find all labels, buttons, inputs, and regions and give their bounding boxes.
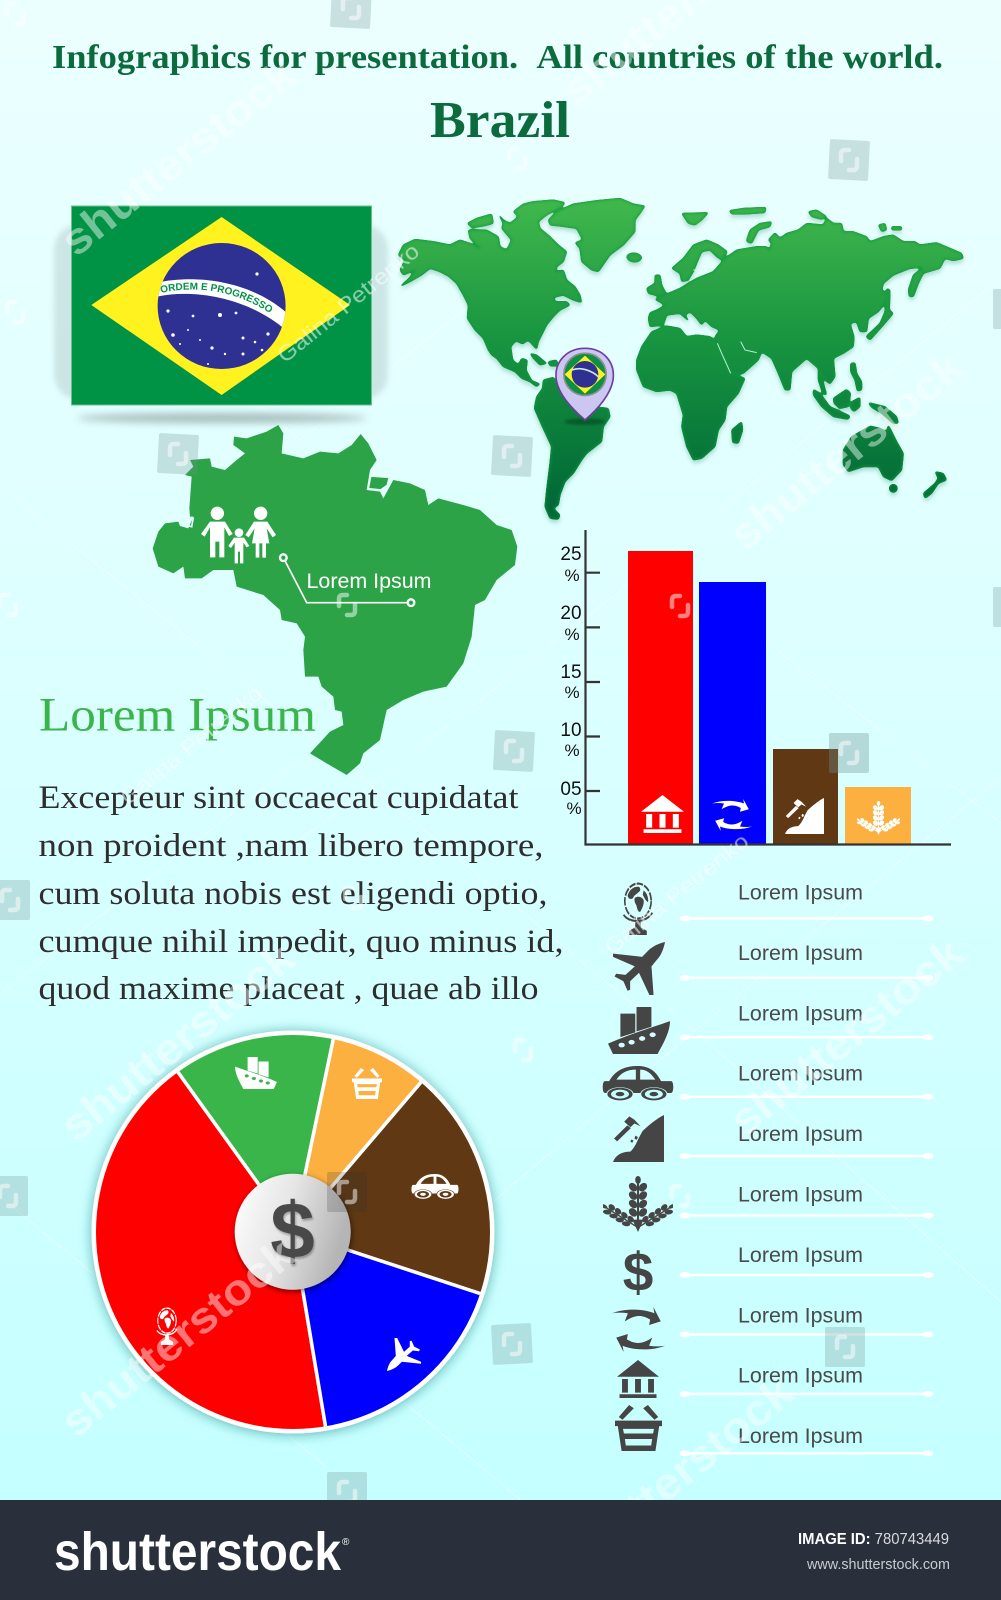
chart axes and ticks [586,530,951,844]
shutterstock watermark text: shutterstock [51,933,304,1151]
icon: dollar: $ [623,1241,653,1303]
pie chart [83,1023,503,1444]
axis labels: 05 [560,779,582,800]
legend labels: Lorem Ipsum [738,1364,863,1388]
title: Infographics for presentation. All countries of the world. [52,39,943,76]
axis labels: % [564,625,580,644]
icon: bank [617,1360,659,1398]
flag motto: ORDEM E PROGRESSO [160,282,272,312]
footer logo: shutterstock [54,1522,342,1582]
body paragraph: cumque nihil impedit, quo minus id, [38,924,564,960]
legend divider lines [680,916,934,1456]
icon: ship [608,1007,670,1054]
eurasia, africa and oceania [637,207,963,498]
site url: www.shutterstock.com [806,1557,950,1573]
legend labels: Lorem Ipsum [738,1122,863,1146]
legend labels: Lorem Ipsum [738,1424,863,1448]
bar: orange [845,787,911,844]
author watermark text: Galina Petrenko [599,828,753,960]
callout label: Lorem Ipsum [306,569,432,593]
legend labels: Lorem Ipsum [738,880,863,904]
axis labels: 25 [560,544,582,565]
map pin with flag [556,348,613,425]
author watermark text: Galina Petrenko [272,238,424,368]
axis labels: 20 [560,603,582,624]
text heading: Lorem Ipsum [39,688,316,742]
axis labels: % [564,741,580,760]
body paragraph: non proident ,nam libero tempore, [38,828,544,864]
pie centre hub [235,1174,351,1290]
body paragraph [38,780,564,1007]
body paragraph: Excepteur sint occaecat cupidatat [38,780,518,816]
legend labels: Lorem Ipsum [738,941,863,965]
shutterstock watermark text: shutterstock [720,928,973,1146]
icon: exchange arrows [612,1307,665,1352]
icon: basket [615,1405,662,1451]
hub dollar sign: $ [270,1186,315,1275]
author watermark text [115,238,753,960]
legend labels: Lorem Ipsum [738,1001,863,1025]
icon: plane [613,942,665,995]
heading: country name: Brazil [430,92,570,149]
footer bar [0,1500,1001,1600]
axis labels: 15 [560,662,582,683]
americas and greenland [398,198,645,519]
icon: mining [613,1115,664,1162]
axis labels: % [564,683,580,702]
author watermark text: Galina Petrenko [115,680,267,810]
icon: family [201,507,276,563]
axis labels: % [566,799,582,818]
body paragraph: cum soluta nobis est eligendi optio, [38,876,548,912]
panel: Brazil flag [52,206,390,428]
icon: globe [624,884,652,935]
bar chart [560,530,951,844]
shutterstock watermark text: shutterstock [550,1367,803,1585]
world map [398,198,963,519]
body paragraph: quod maxime placeat , quae ab illo [38,971,538,1007]
registered mark: ® [342,1537,350,1548]
legend labels: Lorem Ipsum [738,1243,863,1267]
pie slices [96,1035,490,1429]
axis labels: % [564,566,580,585]
legend labels: Lorem Ipsum [738,1062,863,1086]
legend labels: Lorem Ipsum [738,1182,863,1206]
pie icons [157,1057,459,1371]
bar: red [628,551,693,844]
shutterstock watermark text: shutterstock [720,342,973,560]
bar: brown [773,749,838,844]
bar: blue [699,582,766,844]
legend list [596,880,934,1456]
map sea lines [693,269,757,373]
Brazil country map [153,425,517,775]
axis labels: 10 [560,720,582,741]
legend labels [738,880,863,1448]
icon: car [603,1066,673,1101]
bar icons [641,795,904,835]
axis labels [560,544,582,818]
shutterstock watermark text: shutterstock [51,1229,304,1447]
image id: IMAGE ID: 780743449 [798,1531,949,1548]
shutterstock watermark text: shutterstock [52,50,306,266]
icon: wheat [596,1176,680,1233]
legend labels: Lorem Ipsum [738,1303,863,1327]
callout leader line [280,554,414,606]
